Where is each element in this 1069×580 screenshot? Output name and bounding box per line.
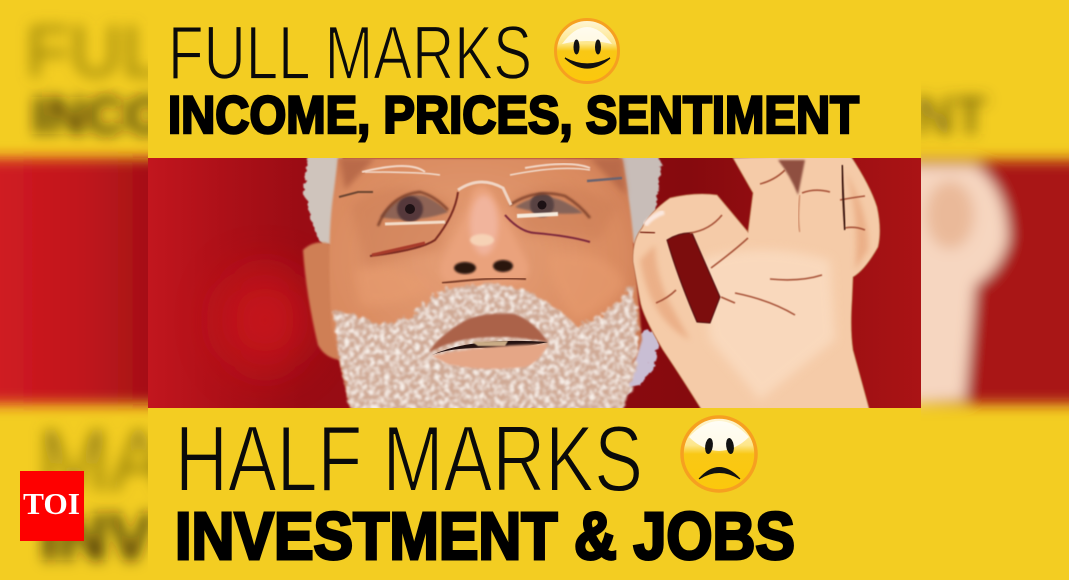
mouth: [430, 314, 548, 369]
eyes: [378, 192, 590, 226]
finger separations: [778, 160, 805, 195]
ear: [303, 242, 340, 360]
heading: full marks: FULL MARKS: [168, 11, 532, 96]
hand shading: [640, 170, 868, 340]
panel: central yellow top: [148, 0, 921, 158]
red backdrop: [148, 158, 921, 408]
icon: sad face: [682, 417, 756, 491]
hand: [633, 155, 880, 412]
beard: [333, 283, 638, 412]
panel: blurred left side: FULL: [26, 12, 202, 92]
photo: man making OK gesture: [148, 150, 921, 412]
forehead lines: [362, 164, 590, 172]
finger creases: [656, 170, 865, 315]
eye socket shadow: [358, 192, 600, 260]
glasses: [339, 168, 622, 256]
nose: [440, 186, 529, 283]
panel: blurred left side: MA: [38, 413, 168, 509]
forehead shadow: [340, 158, 626, 195]
logo: TOI: TOI: [23, 486, 80, 521]
heading: half marks: HALF MARKS: [175, 406, 643, 511]
panel: blurred right side: [900, 86, 1069, 404]
face: [303, 158, 642, 412]
fingertip shine: [645, 212, 664, 225]
logo: TOI: [20, 471, 84, 541]
subheading: income, prices, sentiment: INCOME, PRICES, SENTIMENT: [168, 86, 859, 145]
cheek glow: [580, 266, 618, 310]
panel: blurred right side: NT: [915, 86, 987, 146]
panel: blurred left side: INCOME: [32, 86, 248, 146]
icon: smiley face: [556, 20, 618, 82]
subheading: investment and jobs: INVESTMENT & JOBS: [175, 499, 795, 574]
panel: central yellow bottom: [148, 408, 921, 580]
gap between fingers: [667, 233, 720, 323]
panel: blurred left side: INV: [40, 499, 153, 575]
panel: blurred left side: [0, 18, 148, 570]
hair: [306, 150, 660, 395]
